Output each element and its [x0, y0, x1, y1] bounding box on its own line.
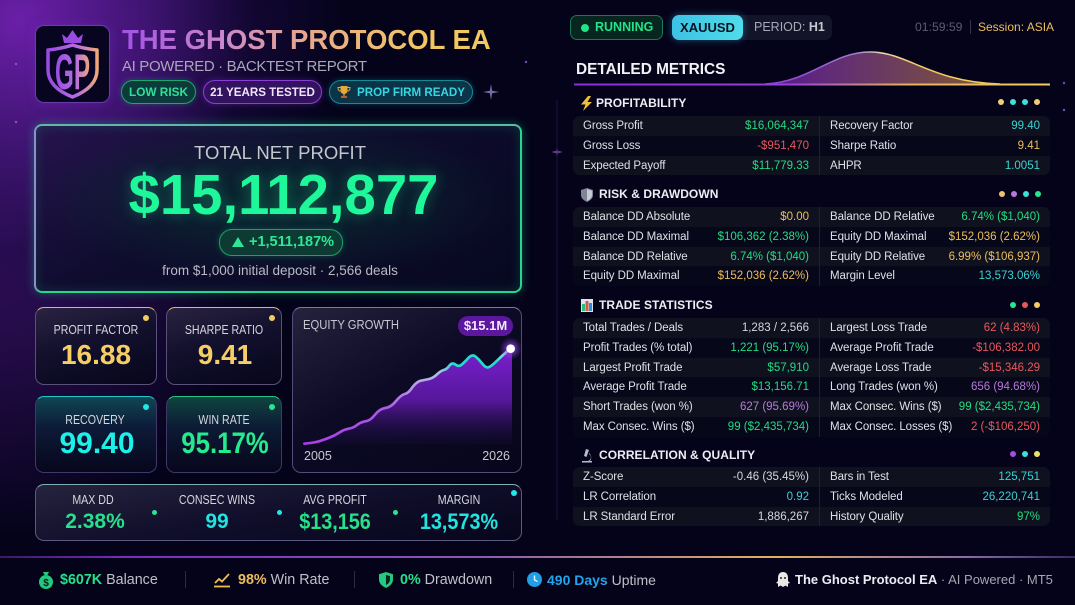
stat: consec wins: 99: [205, 510, 229, 533]
panel: summary strip: [35, 484, 522, 541]
table: trade statistics: Average Profit Trade: [830, 342, 934, 354]
table: risk and drawdown: $106,362 (2.38%): [718, 231, 809, 243]
table: profitability: $11,779.33: [752, 160, 809, 172]
table: risk and drawdown: Equity DD Maximal: [583, 270, 679, 282]
label: TOTAL NET PROFIT: [194, 142, 366, 163]
stat: avg profit: $13,156: [299, 509, 371, 534]
stat: margin: MARGIN: [438, 493, 480, 507]
table: trade statistics: 656 (94.68%): [971, 381, 1040, 393]
stat: margin: 13,573%: [420, 509, 498, 534]
card: sharpe ratio: SHARPE RATIO: [185, 323, 263, 337]
chart label: EQUITY GROWTH: [303, 318, 399, 332]
section header: risk and drawdown: RISK & DRAWDOWN: [599, 186, 718, 200]
table: correlation and quality: 125,751: [998, 471, 1040, 483]
table: risk and drawdown: Margin Level: [830, 270, 895, 282]
stat: avg profit: [299, 493, 371, 534]
table: risk and drawdown: 6.99% ($106,937): [949, 251, 1040, 263]
logo badge: [35, 25, 110, 103]
section header: correlation and quality: [582, 448, 1040, 462]
table: trade statistics: -$106,382.00: [972, 342, 1040, 354]
table: trade statistics: Average Loss Trade: [830, 362, 931, 374]
section header: profitability: PROFITABILITY: [596, 96, 686, 110]
badge: prop firm ready: [329, 80, 473, 104]
card: win rate: WIN RATE: [198, 413, 250, 427]
percent gain pill: +1,511,187%: [249, 234, 334, 250]
line chart: [303, 338, 521, 445]
table: profitability: AHPR: [830, 160, 862, 172]
table: risk and drawdown: Balance DD Maximal: [583, 231, 689, 243]
table: trade statistics: Max Consec. Wins ($): [583, 421, 695, 433]
table: trade statistics: Max Consec. Wins ($): [830, 401, 942, 413]
section header: risk and drawdown: [581, 186, 1041, 202]
stat: consec wins: [179, 493, 255, 533]
footer: drawdown: 0% Drawdown: [400, 572, 492, 588]
stat: max dd: [65, 493, 125, 533]
table: profitability: [573, 116, 1050, 175]
badge: low risk: [121, 80, 196, 104]
table: profitability: 1.0051: [1005, 160, 1040, 172]
table: trade statistics: 99 ($2,435,734): [728, 421, 809, 433]
footer: win rate: 98% Win Rate: [238, 572, 329, 588]
badge: years tested: [203, 80, 322, 104]
status: running: RUNNING: [595, 20, 653, 34]
value pill: $15.1M: [464, 318, 507, 333]
subtitle: AI POWERED · BACKTEST REPORT: [122, 58, 367, 75]
profit value: $15,112,877: [129, 163, 438, 226]
table: risk and drawdown: $0.00: [780, 211, 809, 223]
card: recovery: [35, 396, 157, 473]
section header: correlation and quality: CORRELATION & QUALITY: [599, 448, 755, 462]
badge: years tested: 21 YEARS TESTED: [210, 86, 315, 99]
table: correlation and quality: Bars in Test: [830, 471, 889, 483]
clock: 01:59:59: [915, 20, 962, 34]
table: trade statistics: 1,221 (95.17%): [730, 342, 809, 354]
table: correlation and quality: History Quality: [830, 511, 904, 523]
header wave graphic: [574, 51, 1050, 86]
table: trade statistics: 2 (-$106,250): [971, 421, 1040, 433]
table: correlation and quality: 97%: [1017, 511, 1040, 523]
stat: margin: [420, 493, 498, 534]
table: profitability: Sharpe Ratio: [830, 140, 896, 152]
value pill: [458, 316, 513, 336]
table: trade statistics: 1,283 / 2,566: [742, 322, 809, 334]
table: risk and drawdown: 6.74% ($1,040): [730, 251, 809, 263]
panel: total net profit: [34, 124, 522, 293]
table: risk and drawdown: $152,036 (2.62%): [718, 270, 809, 282]
table: risk and drawdown: Balance DD Relative: [583, 251, 688, 263]
table: trade statistics: -$15,346.29: [979, 362, 1040, 374]
percent gain pill: [219, 229, 343, 256]
symbol and period selector: [672, 15, 832, 40]
footer: balance: $: [43, 578, 49, 589]
card: win rate: [166, 396, 282, 473]
heading: detailed metrics: DETAILED METRICS: [576, 61, 725, 78]
table: correlation and quality: 26,220,741: [982, 491, 1040, 503]
footer: balance: $607K Balance: [60, 572, 158, 588]
table: trade statistics: Profit Trades (% total): [583, 342, 692, 354]
table: trade statistics: Short Trades (won %): [583, 401, 693, 413]
table: profitability: Gross Loss: [583, 140, 640, 152]
session: Session: ASIA: [978, 20, 1054, 34]
table: trade statistics: [573, 318, 1050, 437]
table: profitability: Expected Payoff: [583, 160, 665, 172]
table: risk and drawdown: Equity DD Maximal: [830, 231, 926, 243]
table: correlation and quality: LR Correlation: [583, 491, 656, 503]
deposit note: from $1,000 initial deposit · 2,566 deals: [162, 263, 398, 278]
section header: trade statistics: [581, 298, 1040, 312]
section header: profitability: [581, 96, 1040, 111]
table: trade statistics: Average Profit Trade: [583, 381, 687, 393]
chart: equity growth: [292, 307, 522, 473]
table: trade statistics: $13,156.71: [751, 381, 809, 393]
card: recovery: RECOVERY: [65, 413, 125, 427]
footer: brand: The Ghost Protocol EA · AI Powered · MT5: [795, 572, 1053, 587]
table: trade statistics: 99 ($2,435,734): [959, 401, 1040, 413]
table: trade statistics: Long Trades (won %): [830, 381, 938, 393]
table: risk and drawdown: Balance DD Absolute: [583, 211, 690, 223]
axis start year: 2005: [304, 449, 332, 463]
table: profitability: 99.40: [1011, 120, 1040, 132]
table: correlation and quality: 0.92: [787, 491, 809, 503]
card: recovery: 99.40: [59, 427, 135, 460]
icon: trophy: [338, 86, 350, 98]
table: correlation and quality: 1,886,267: [758, 511, 809, 523]
table: correlation and quality: -0.46 (35.45%): [733, 471, 809, 483]
card: win rate: 95.17%: [181, 427, 269, 460]
table: profitability: $16,064,347: [745, 120, 809, 132]
table: profitability: Gross Profit: [583, 120, 643, 132]
table: trade statistics: 627 (95.69%): [740, 401, 809, 413]
table: risk and drawdown: $152,036 (2.62%): [949, 231, 1040, 243]
table: risk and drawdown: 13,573.06%: [979, 270, 1040, 282]
table: trade statistics: Max Consec. Losses ($): [830, 421, 952, 433]
table: correlation and quality: LR Standard Error: [583, 511, 675, 523]
table: profitability: -$951,470: [757, 140, 809, 152]
footer: uptime: 490 Days Uptime: [547, 572, 656, 588]
table: correlation and quality: Z-Score: [583, 471, 623, 483]
card: profit factor: [35, 307, 157, 385]
stat: max dd: 2.38%: [65, 510, 125, 533]
table: risk and drawdown: Balance DD Relative: [830, 211, 935, 223]
table: trade statistics: $57,910: [767, 362, 809, 374]
table: profitability: 9.41: [1018, 140, 1040, 152]
table: trade statistics: 62 (4.83%): [984, 322, 1040, 334]
section header: trade statistics: TRADE STATISTICS: [599, 298, 713, 312]
table: profitability: Recovery Factor: [830, 120, 913, 132]
footer divider: [0, 556, 1075, 558]
card: sharpe ratio: 9.41: [198, 339, 252, 370]
stat: consec wins: CONSEC WINS: [179, 493, 255, 507]
table: trade statistics: Largest Profit Trade: [583, 362, 682, 374]
card: profit factor: 16.88: [61, 339, 131, 370]
table: risk and drawdown: [573, 207, 1050, 286]
title: THE GHOST PROTOCOL EA: [122, 24, 491, 55]
symbol and period selector: PERIOD: H1: [754, 20, 825, 34]
axis end year: 2026: [482, 449, 510, 463]
table: trade statistics: Total Trades / Deals: [583, 322, 683, 334]
table: risk and drawdown: 6.74% ($1,040): [961, 211, 1040, 223]
table: risk and drawdown: Equity DD Relative: [830, 251, 925, 263]
card: sharpe ratio: [166, 307, 282, 385]
status: running: [570, 15, 663, 40]
badge: prop firm ready: PROP FIRM READY: [357, 86, 465, 99]
table: trade statistics: Largest Loss Trade: [830, 322, 927, 334]
table: correlation and quality: [573, 467, 1050, 526]
badge: low risk: LOW RISK: [129, 85, 188, 99]
card: profit factor: PROFIT FACTOR: [54, 323, 138, 337]
stat: max dd: MAX DD: [72, 493, 114, 507]
table: correlation and quality: Ticks Modeled: [830, 491, 903, 503]
stat: avg profit: AVG PROFIT: [303, 493, 367, 507]
symbol and period selector: XAUUSD: [680, 20, 735, 35]
